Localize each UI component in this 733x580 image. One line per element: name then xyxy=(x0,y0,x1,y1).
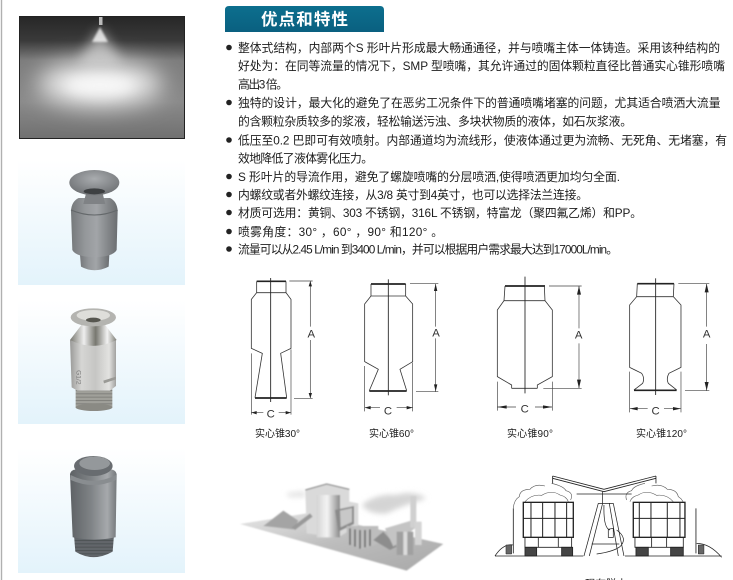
diagram: 120 degree nozzle xyxy=(630,278,711,440)
coal pile xyxy=(263,511,298,529)
bullet item 3: 低压至0.2 巴即可有效喷射。内部通道均为流线形，使液体通过更为流畅、无死角、无堵塞，有 xyxy=(238,134,727,148)
duct xyxy=(373,532,397,550)
diagram: 90 degree nozzle: C xyxy=(521,404,529,416)
bullet item 1: 整体式结构，内部两个S 形叶片形成最大畅通通径，并与喷嘴主体一体铸造。采用该种结构的 xyxy=(238,41,720,55)
diagram: 60 degree nozzle: C xyxy=(384,406,392,418)
precipitator xyxy=(347,526,378,549)
diagram: 90 degree nozzle: A xyxy=(575,330,583,342)
illustration: power plant xyxy=(240,484,443,571)
diagram: 30 degree nozzle: C xyxy=(267,408,275,420)
caption: 90 degree: 实心锥90° xyxy=(507,427,553,440)
diagram: 120 degree nozzle: A xyxy=(703,328,711,340)
conveyor xyxy=(292,513,313,530)
diagram: 60 degree nozzle xyxy=(365,279,440,440)
bullet item 1: 高出3 倍。 xyxy=(238,78,288,92)
nozzle 2 xyxy=(70,308,117,411)
ground line and side pumps xyxy=(495,543,722,557)
chimney xyxy=(410,496,416,528)
spray arms xyxy=(553,476,656,494)
nozzle 1 xyxy=(69,170,119,270)
caption: 120 degree: 实心锥120° xyxy=(636,427,687,440)
heading tab: 优点和特性 xyxy=(261,10,348,29)
bullet item 2: 的含颗粒杂质较多的浆液，轻松输送污浊、多块状物质的液体，如石灰浆液。 xyxy=(238,114,632,128)
bullet item 5: 内螺纹或者外螺纹连接，从3/8 英寸到4英寸，也可以选择法兰连接。 xyxy=(238,188,588,202)
nozzle 3 xyxy=(70,456,117,557)
diagram: 30 degree nozzle xyxy=(251,278,316,440)
bullet item 4: S 形叶片的导流作用，避免了螺旋喷嘴的分层喷洒,使得喷洒更加均匀全面. xyxy=(238,170,620,184)
diagram: 60 degree nozzle: A xyxy=(432,327,440,339)
ground plate xyxy=(240,513,443,571)
absorber tower xyxy=(397,532,413,555)
diagram: 30 degree nozzle: A xyxy=(308,328,316,340)
diagram: 90 degree nozzle xyxy=(497,277,583,440)
page frame line xyxy=(1,0,2,580)
bullet item 2: 独特的设计，最大化的避免了在恶劣工况条件下的普通喷嘴堵塞的问题，尤其适合喷洒大流量 xyxy=(238,96,721,110)
illustration: desulfurization structure xyxy=(495,476,722,557)
bullet item 1: 好处为：在同等流量的情况下，SMP 型喷嘴，其允许通过的固体颗粒直径比普通实心锥形喷嘴 xyxy=(238,59,725,73)
bullet item 6: 材质可选用：黄铜、303 不锈钢，316L 不锈钢，特富龙（聚四氟乙烯）和PP。 xyxy=(238,206,642,220)
bullet item 8: 流量可以从2.45 L/min 到3400 L/min，并可以根据用户需求最大达到17000L/min。 xyxy=(238,242,618,256)
right tank xyxy=(633,502,696,556)
bullet item 1 xyxy=(226,41,725,92)
diagram: 120 degree nozzle: C xyxy=(652,406,660,418)
bullet item 7: 喷雾角度：30° ，60° ，90° 和120° 。 xyxy=(238,225,443,239)
A-frame tower xyxy=(584,492,624,556)
left tank xyxy=(513,502,573,556)
product panel 3: dark threaded nozzle xyxy=(18,448,185,573)
spray clouds xyxy=(513,483,685,508)
heading tab xyxy=(225,6,384,32)
caption: 30 degree: 实心锥30° xyxy=(255,427,300,440)
product panel 2: stainless threaded nozzle xyxy=(18,300,185,424)
bullet item 3: 效地降低了液体雾化压力。 xyxy=(238,152,373,166)
product panel 1: nozzle with flared head xyxy=(18,160,185,285)
caption: 60 degree: 实心锥60° xyxy=(369,427,414,440)
main boiler building xyxy=(305,484,358,537)
feature list xyxy=(226,41,727,256)
smoke xyxy=(362,493,427,514)
bullet item 3 xyxy=(226,134,727,166)
photo: solid cone spray xyxy=(19,16,185,139)
nozzle 2: G1/2 xyxy=(74,370,81,385)
bullet item 2 xyxy=(226,96,721,128)
